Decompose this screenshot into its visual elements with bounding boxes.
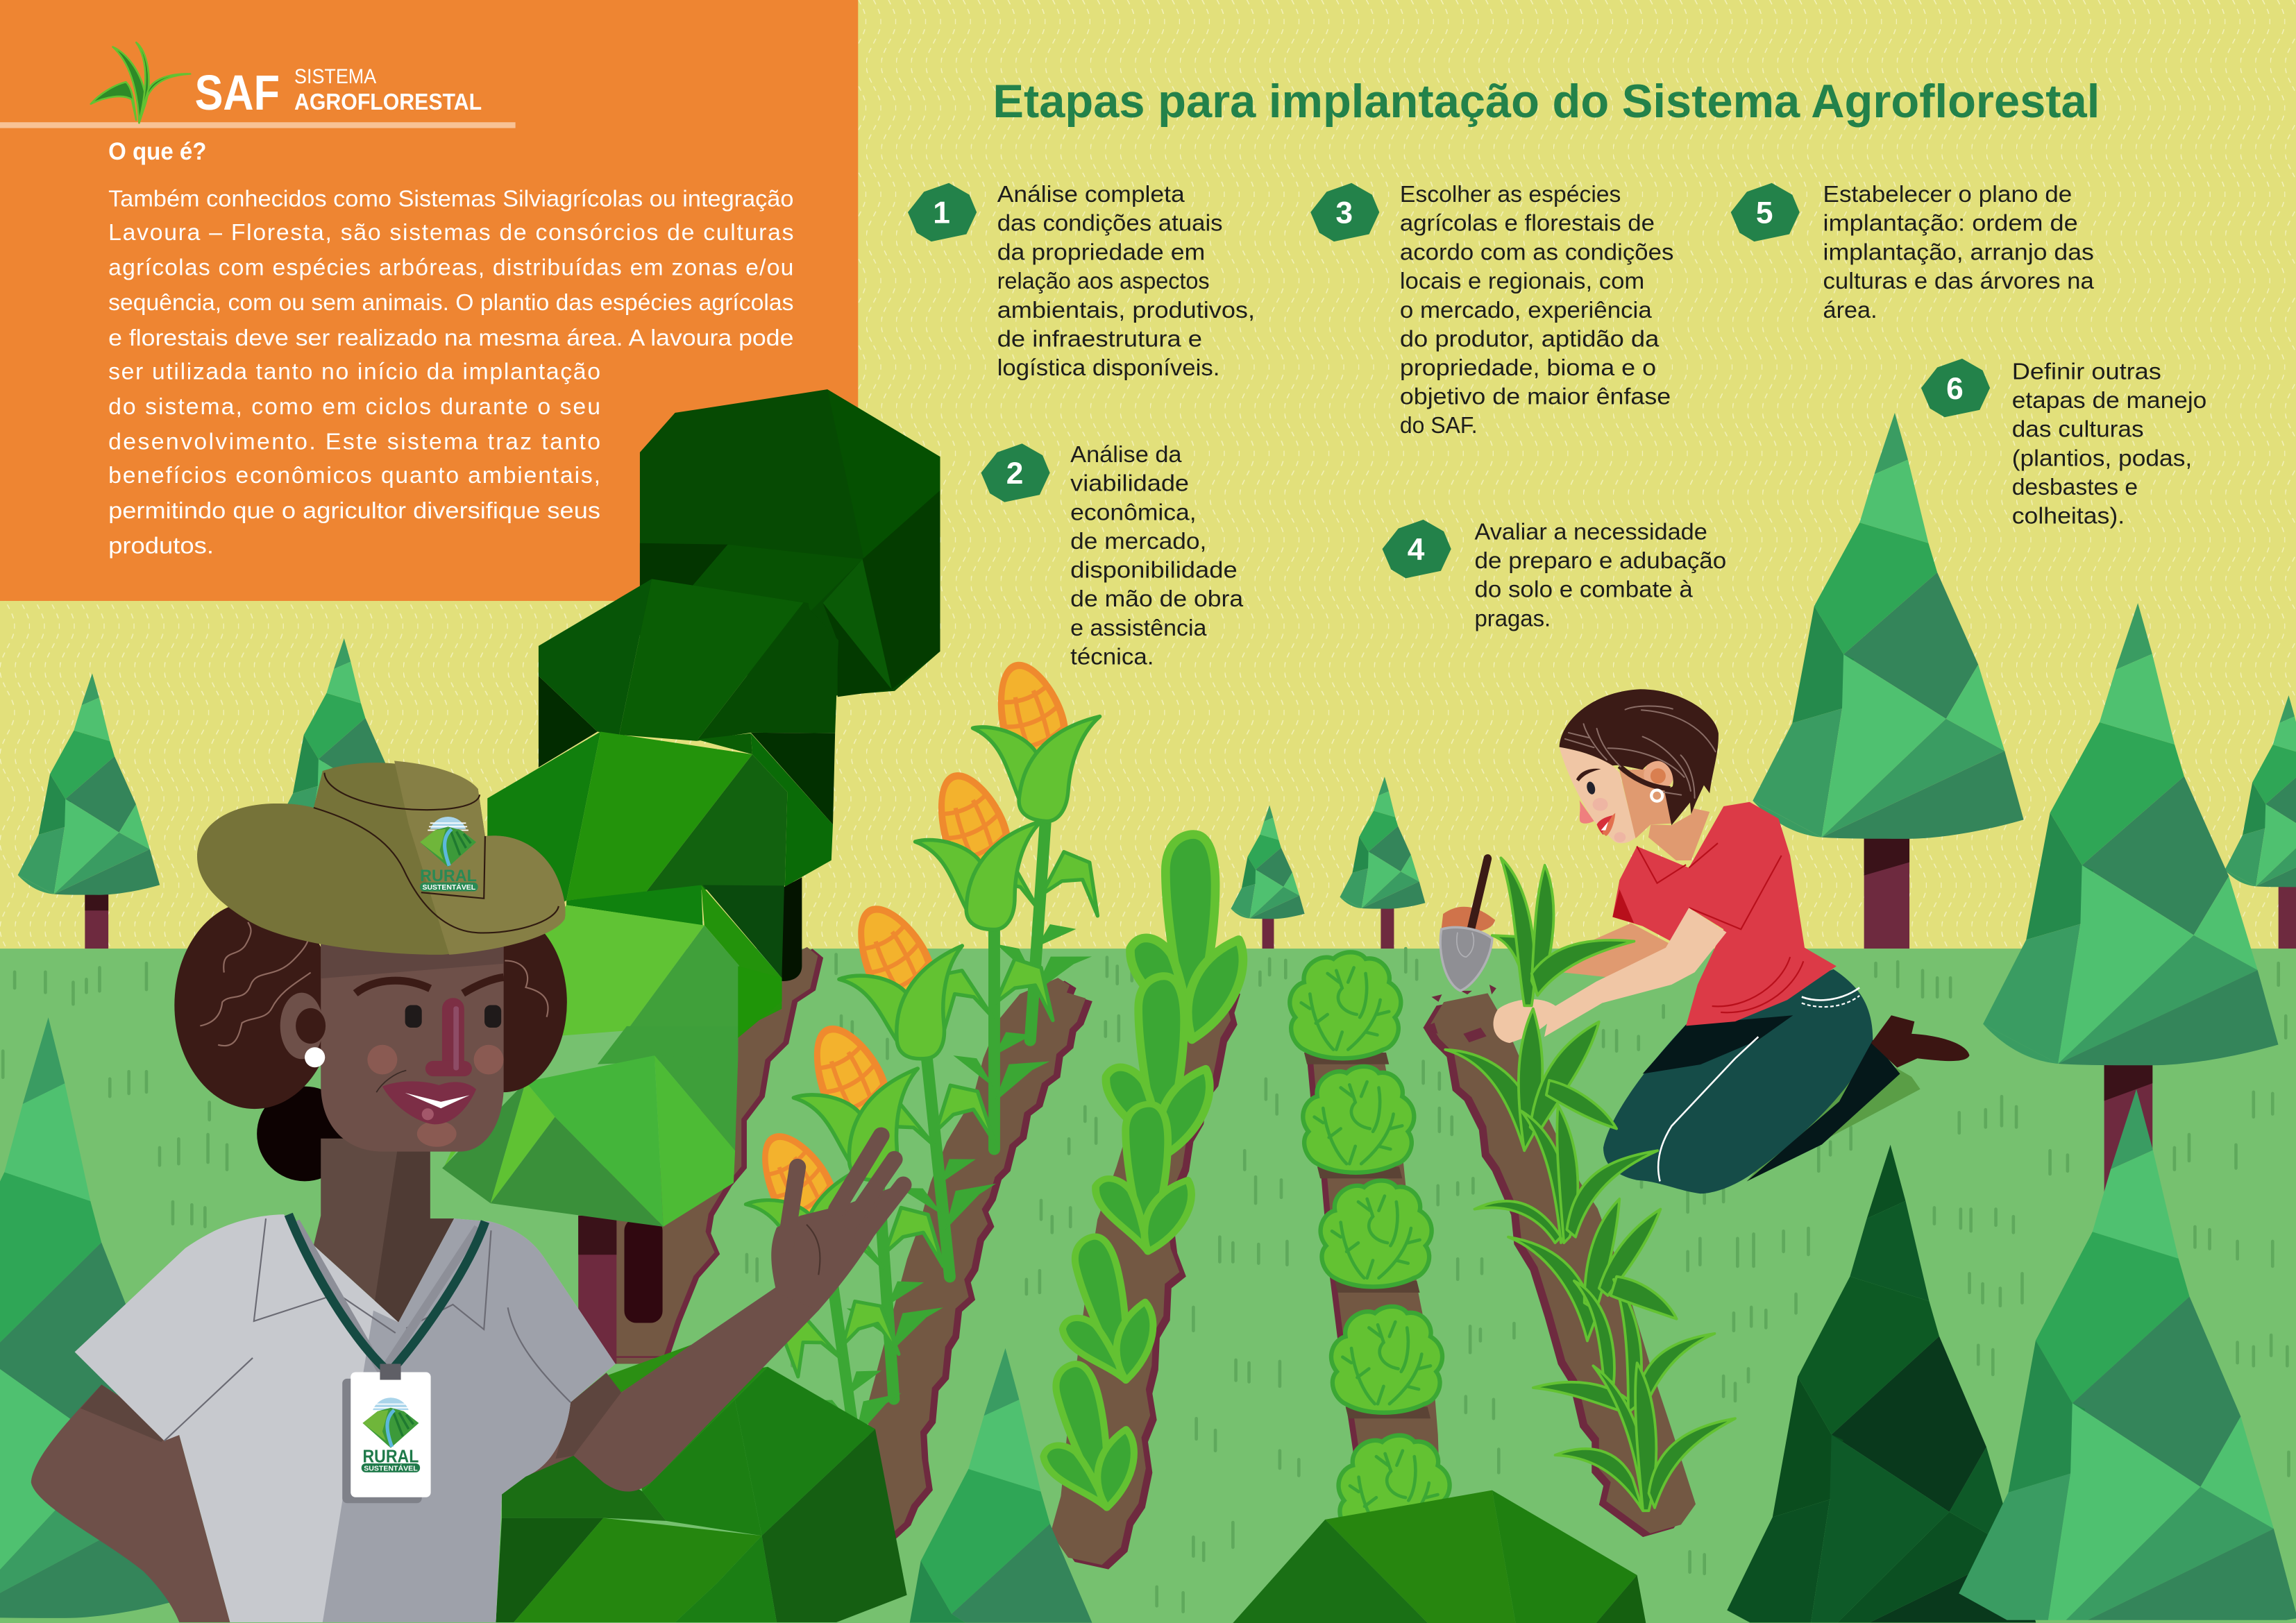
step 2: 2 [1006,457,1023,491]
earring [1651,790,1662,801]
step 6 [1921,358,2206,529]
step 4: do solo e combate à [1474,577,1694,602]
agronomist woman and bush [31,761,907,1622]
seedling A [1445,1009,1617,1150]
face [280,943,504,1152]
step 3: Escolher as espécies [1400,181,1621,207]
step 2: Análise da [1070,441,1182,467]
planting hand [1442,907,1495,933]
step 2 [981,441,1244,670]
farmer head [1560,689,1719,860]
corn plants [735,648,1115,1493]
hat logo: SUSTENTÁVEL [423,883,475,892]
spiky seedlings [1445,858,1735,1511]
grass ticks [3,949,2288,1612]
soil row 3 [1306,1048,1441,1524]
canopy top [640,389,940,697]
neck [1648,808,1710,860]
step 5: culturas e das árvores na [1823,268,2095,294]
woman hair back [174,901,567,1181]
step 1: relação aos aspectos [997,268,1210,294]
step 1: Análise completa [997,181,1185,207]
step 2: de mercado, [1070,528,1206,554]
step 5: implantação: ordem de [1823,210,2078,236]
intro text: ser utilizada tanto no início da implantação [108,358,600,384]
shadow [1747,1058,1921,1182]
intro text: agrícolas com espécies arbóreas, distribuídas em zonas e/ou [108,255,793,281]
soil row 1 [868,978,1092,1540]
seedling B [1474,1105,1657,1243]
background tree far left [18,673,160,949]
step 6: Definir outras [2012,358,2161,384]
wavy sky pattern [0,0,2296,950]
logo: leaf [91,42,190,123]
canopy third [487,731,833,913]
background tree small centre [1231,805,1305,949]
step 5: implantação, arranjo das [1823,239,2094,264]
intro text: sequência, com ou sem animais. O plantio das espécies agrícolas [108,289,793,316]
step 3: o mercado, experiência [1400,297,1652,323]
large tree far right [1983,603,2279,1207]
boot [1871,1015,1969,1068]
id badge: SUSTENTÁVEL [364,1463,418,1472]
step 1: logística disponíveis. [997,355,1219,380]
bush front left [496,1343,907,1622]
eye [1585,781,1596,795]
orange panel [0,0,858,601]
step 3: objetivo de maior ênfase [1400,384,1671,409]
hair [1560,689,1719,825]
intro text: permitindo que o agricultor diversifique seus [108,498,600,524]
step 6: etapas de manejo [2012,387,2206,413]
step 3: do SAF. [1400,412,1478,438]
step 6: das culturas [2012,416,2144,442]
cheeks [1593,798,1608,811]
step 4: pragas. [1474,605,1551,631]
step 1: da propriedade em [997,239,1205,264]
shovel [1470,858,1487,933]
foreground tree left [0,1017,210,1618]
intro text: Lavoura – Floresta, são sistemas de consórcios de culturas [108,219,793,246]
large tree right [1753,413,2024,949]
soil clods [1423,985,1496,1042]
intro text: e florestais deve ser realizado na mesma área. A lavoura pode [108,325,793,351]
step 3: 3 [1335,196,1353,230]
front arm [1544,908,1726,1037]
step 6: 6 [1946,372,1964,406]
tree trunks [578,947,823,1363]
hat [197,761,566,955]
intro text: do sistema, como em ciclos durante o seu [108,393,600,420]
logo: SAF wordmark: SAF [195,65,280,121]
step 5: 5 [1756,196,1773,230]
intro text: produtos. [108,532,214,559]
step 5: Estabelecer o plano de [1823,181,2072,207]
broadleaf tree [442,389,940,1363]
hat logo [420,817,478,892]
step 4: de preparo e adubação [1474,547,1726,573]
id badge: RURAL [362,1447,419,1466]
intro text: desenvolvimento. Este sistema traz tanto [108,429,600,455]
intro text: benefícios econômicos quanto ambientais, [108,462,600,488]
ground [0,949,2296,1623]
canopy second [539,579,838,824]
leafy plants [1024,835,1243,1520]
id badge [342,1363,431,1503]
canopy fourth [444,885,784,1167]
step 2: de mão de obra [1070,586,1244,611]
foreground tree centre bottom [910,1348,1092,1623]
step 1 [908,181,1255,380]
nose [1580,800,1594,824]
lips [1597,815,1612,835]
left arm [31,1384,230,1622]
face [1560,747,1636,843]
hat logo: RURAL [420,867,477,885]
dark foreground tree [1727,1145,2036,1622]
step 3: do produtor, aptidão da [1400,325,1660,351]
step 4: 4 [1408,533,1425,567]
pants [1603,969,1873,1193]
canopy fifth [442,966,782,1227]
step 6: colheitas). [2012,503,2125,529]
farmer body [1423,802,1969,1193]
step 2: econômica, [1070,499,1197,525]
step 6: desbastes e [2012,474,2138,500]
step 1: ambientais, produtivos, [997,297,1255,323]
shirt [75,1214,616,1622]
step 2: e assistência [1070,615,1207,640]
step 1: 1 [933,196,950,230]
farmer kneeling [1423,689,1969,1193]
cabbages [1290,952,1450,1547]
sky background [0,0,2296,950]
lanyard [289,1214,485,1373]
ear [1644,760,1674,790]
soil row 4 [1424,993,1696,1537]
bush bottom centre [1233,1490,1646,1623]
header rule [0,122,516,128]
step 3: propriedade, bioma e o [1400,355,1656,380]
title: Etapas para implantação do Sistema Agroflorestal [993,76,2100,128]
step 1: de infraestrutura e [997,325,1202,351]
soil row 2 [1051,979,1240,1570]
intro text: Também conhecidos como Sistemas Silviagrícolas ou integração [108,185,793,212]
logo: SAF wordmark: AGROFLORESTAL [294,89,482,115]
step 3: agrícolas e florestais de [1400,210,1655,236]
foreground tree right [1959,1089,2296,1620]
step 5: área. [1823,297,1877,323]
step 2: disponibilidade [1070,557,1238,583]
seedling in hand [1492,858,1634,1005]
step 2: técnica. [1070,644,1154,670]
right arm and hand [525,1136,903,1492]
background tree small centre right [1340,776,1425,949]
logo: SAF wordmark: SISTEMA [294,65,376,88]
seedling E [1555,1363,1735,1511]
neck [314,1139,454,1323]
step 2: viabilidade [1070,470,1189,496]
step 6: (plantios, podas, [2012,445,2192,470]
heading: O que é: O que é? [108,138,206,165]
hair highlights [1565,706,1716,798]
background tree right edge [2225,695,2296,949]
intro text [108,185,793,559]
seedling D [1533,1277,1714,1413]
eyebrow [1576,769,1601,781]
step 3 [1310,181,1673,438]
step 3: locais e regionais, com [1400,268,1644,294]
step 5 [1731,181,2095,323]
step 1: das condições atuais [997,210,1223,236]
background tree behind hat [273,638,409,851]
step 3: acordo com as condições [1400,239,1673,264]
canopy layers [444,579,838,1167]
logo: SAF wordmark [195,65,482,121]
step 4: Avaliar a necessidade [1474,518,1707,544]
trunk black [782,877,802,981]
step 4 [1383,518,1726,631]
back arm [1562,923,1671,978]
seedling C [1508,1199,1660,1341]
shirt [1612,802,1837,1026]
